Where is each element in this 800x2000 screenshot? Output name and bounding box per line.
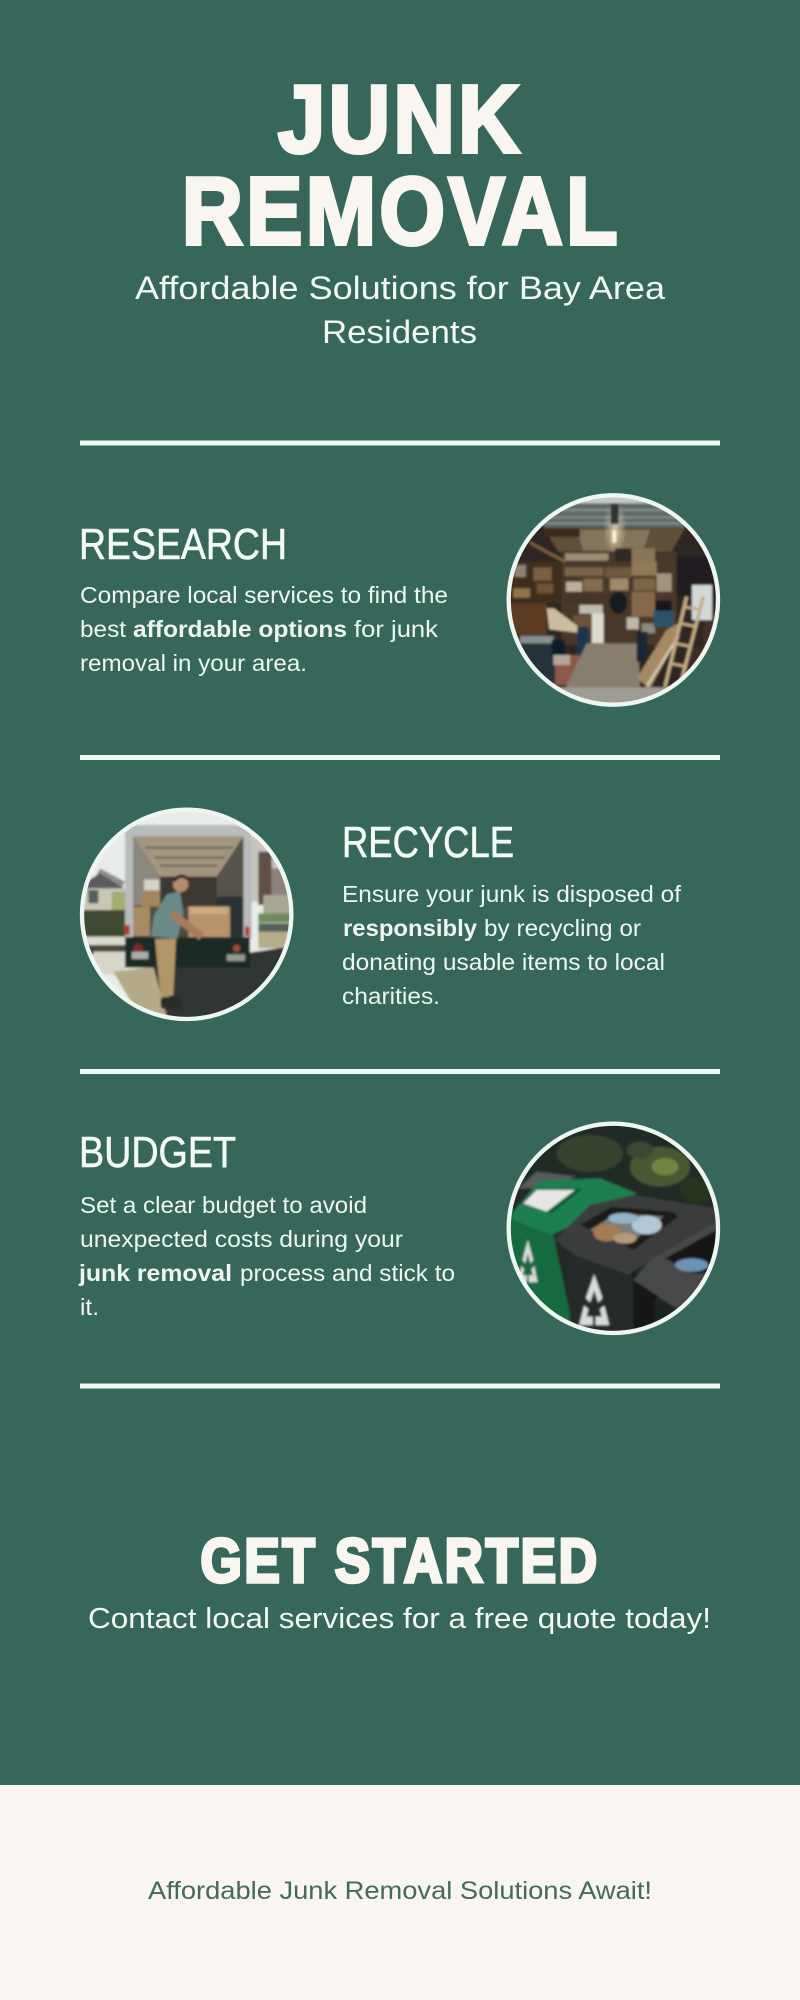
text block: recycle	[342, 881, 682, 1009]
text block: budget: process and stick to	[240, 1260, 455, 1286]
call to action heading: GET STARTED	[200, 1527, 600, 1596]
panel: research	[81, 493, 720, 707]
text block: recycle: by recycling or	[484, 915, 641, 941]
subtitle: Residents	[322, 314, 477, 350]
text block: research: for junk	[354, 616, 439, 642]
heading: recycle: RECYCLE	[342, 818, 514, 867]
text block: budget	[78, 1192, 455, 1320]
heading: research: RESEARCH	[79, 520, 287, 569]
heading: budget: BUDGET	[79, 1128, 236, 1177]
text block: research: removal in your area.	[80, 650, 307, 676]
text block: research: Compare local services to find the	[80, 582, 448, 608]
text block: budget: Set a clear budget to avoid	[80, 1192, 367, 1218]
panel: recycle	[80, 808, 682, 1022]
subtitle: Affordable Solutions for Bay Area	[135, 270, 665, 306]
text block: recycle: Ensure your junk is disposed of	[342, 881, 682, 907]
title: JUNK	[278, 66, 523, 173]
photo: worker loading a moving truck	[80, 808, 294, 1022]
footer text: Affordable Junk Removal Solutions Await!	[148, 1877, 652, 1905]
panel: budget	[78, 1122, 720, 1336]
subtitle	[135, 270, 665, 350]
call to action subtext: Contact local services for a free quote today!	[88, 1603, 711, 1635]
text block: budget: junk removal	[78, 1260, 232, 1286]
text block: budget: it.	[80, 1294, 99, 1320]
text block: recycle: donating usable items to local	[342, 949, 665, 975]
title: REMOVAL	[182, 158, 621, 265]
title	[182, 66, 621, 265]
text block: research: best	[80, 616, 127, 642]
text block: recycle: charities.	[342, 983, 440, 1009]
text block: budget: unexpected costs during your	[80, 1226, 403, 1252]
background: cream footer band	[0, 1785, 800, 2000]
photo: recycling bins	[506, 1122, 720, 1336]
text block: research: affordable options	[133, 616, 347, 642]
photo: cluttered garage	[506, 493, 720, 707]
text block: research	[80, 582, 448, 676]
text block: recycle: responsibly	[343, 915, 477, 941]
